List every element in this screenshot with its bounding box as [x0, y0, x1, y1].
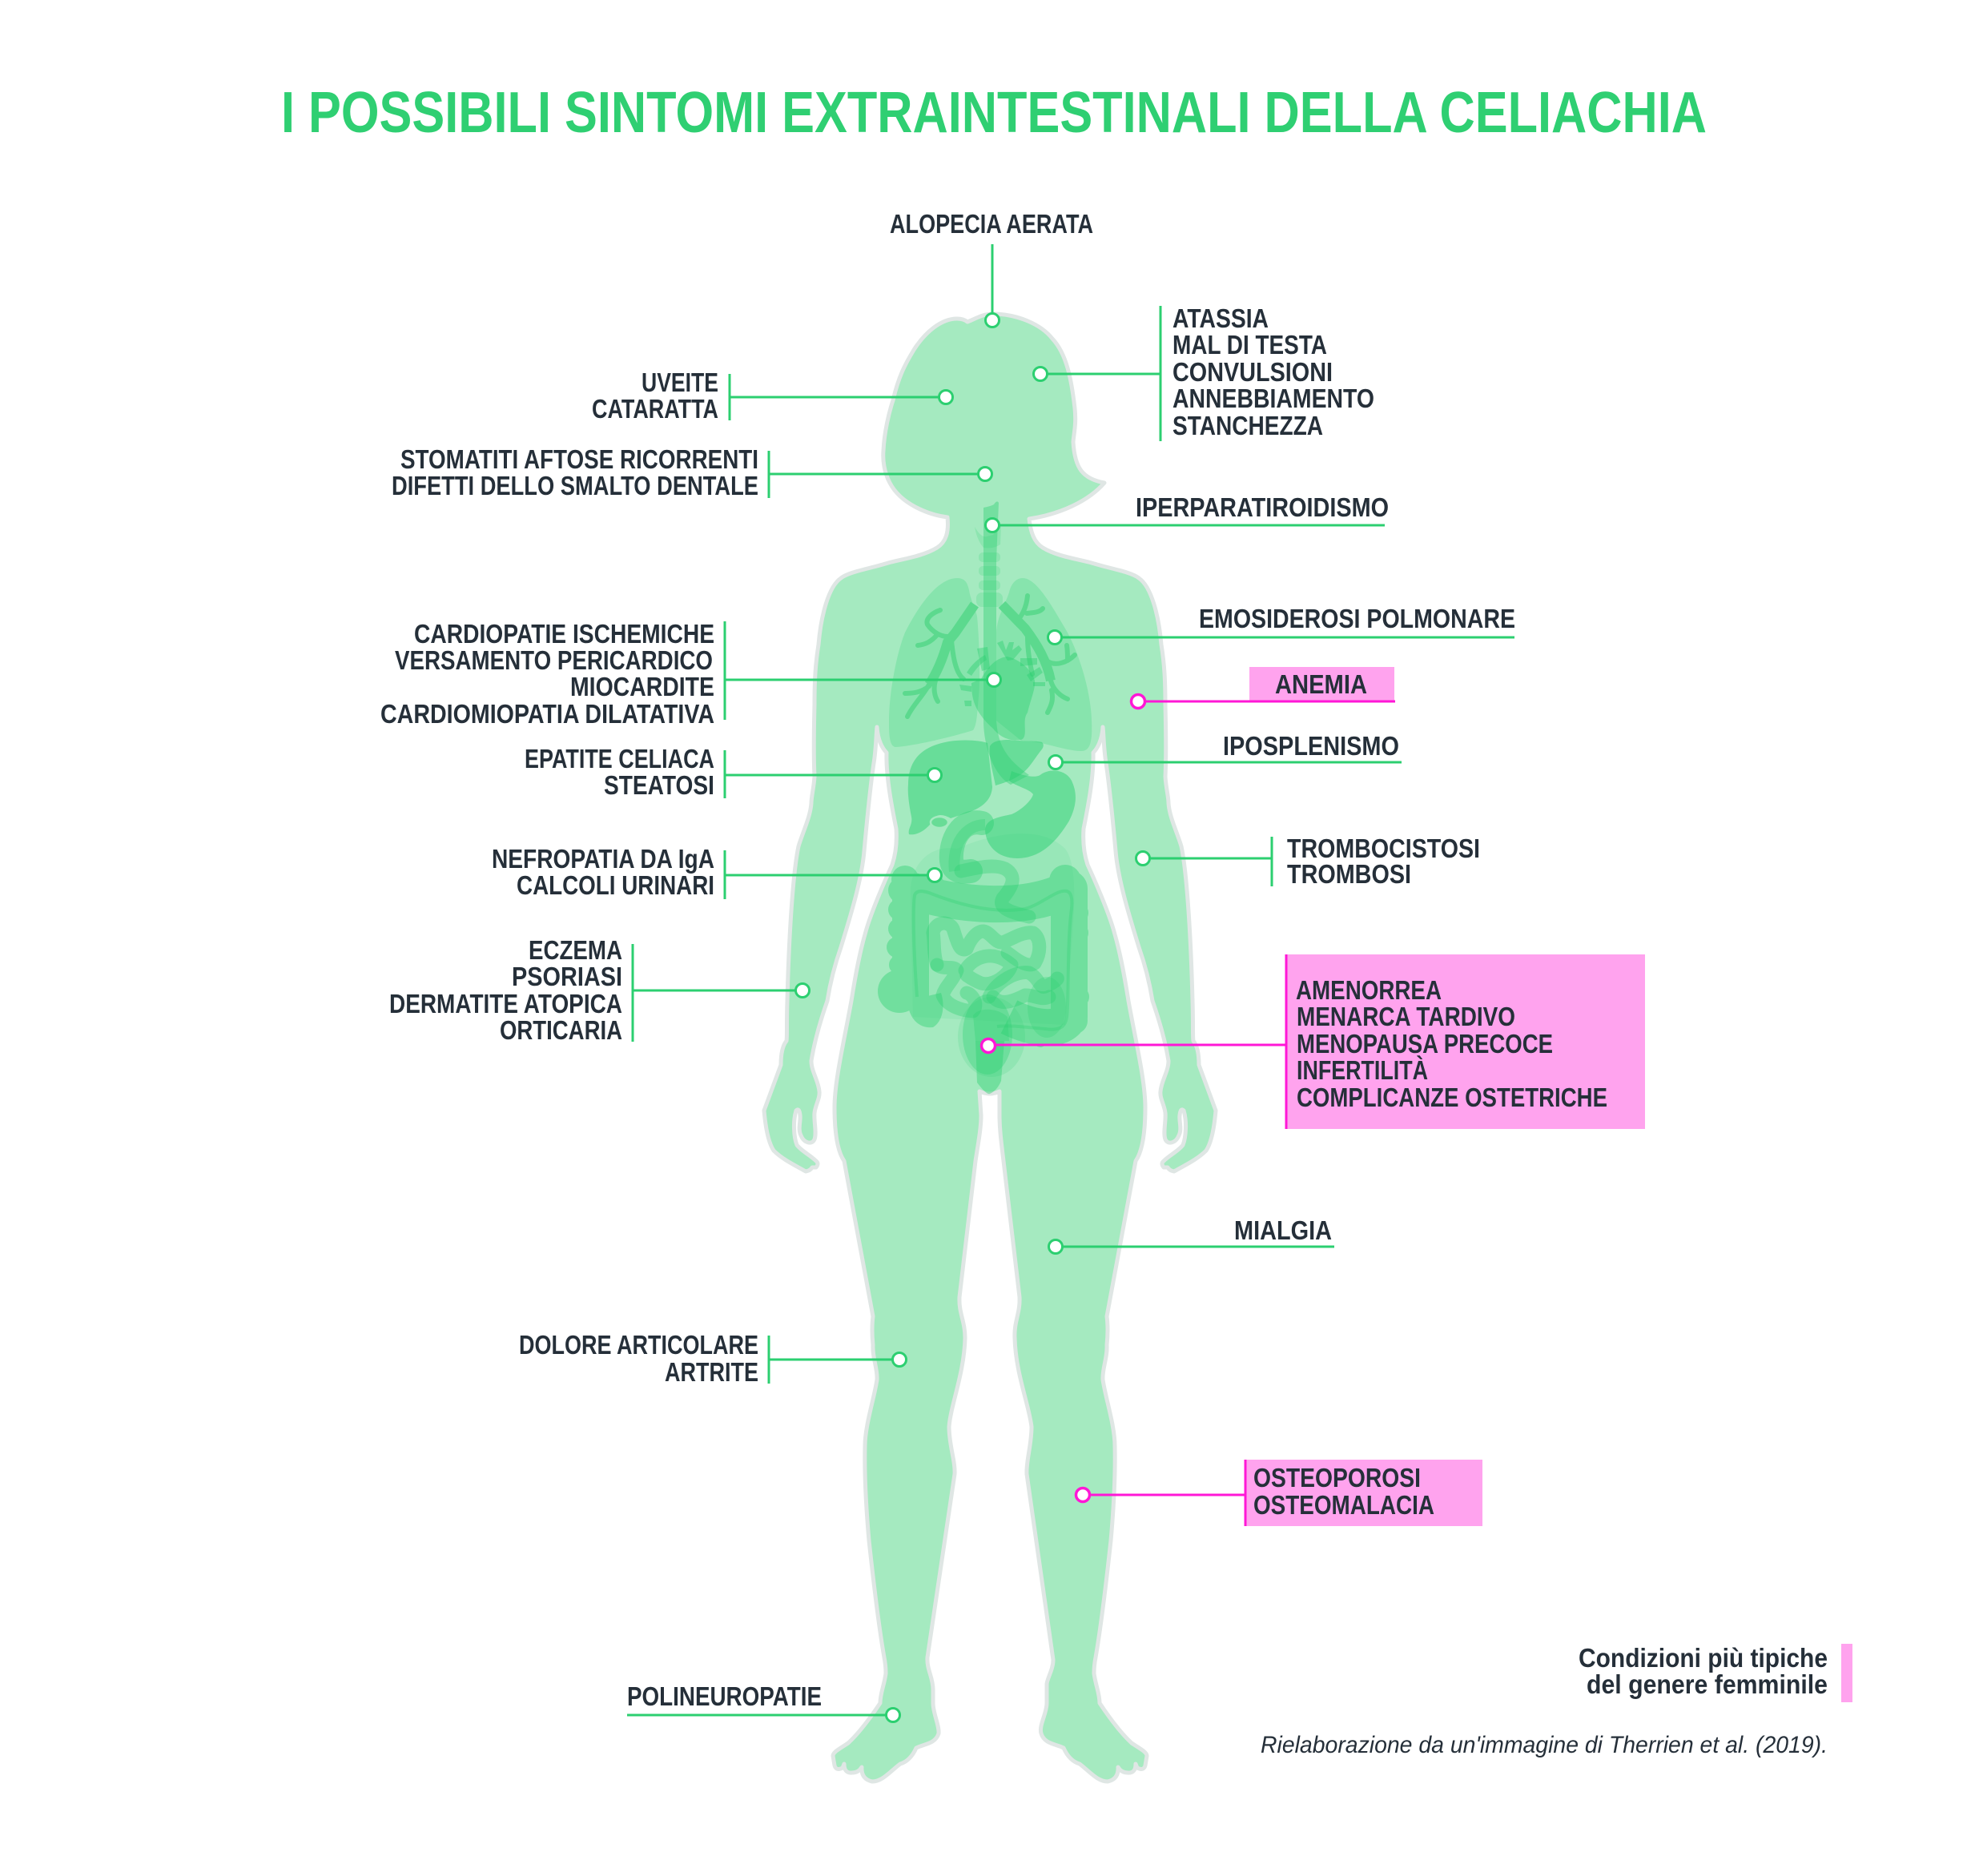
leader line [1056, 1246, 1334, 1247]
leader line [1083, 1460, 1245, 1526]
callout: joints [519, 1330, 907, 1387]
callout: mialgia [1049, 1215, 1334, 1254]
heart [959, 641, 1045, 740]
label list: TROMBOSI [1287, 859, 1411, 889]
label list: MENOPAUSA PRECOCE [1297, 1029, 1553, 1059]
callout: kidneys [492, 844, 942, 900]
small intestine [933, 866, 1057, 1011]
callout: eye [592, 368, 953, 424]
label list [392, 444, 758, 500]
label: IPERPARATIROIDISMO [1136, 492, 1389, 522]
label list [1172, 303, 1374, 440]
callout: neurological symptoms [1033, 303, 1374, 441]
marker [927, 868, 942, 882]
callout: iperparatiroidismo [985, 492, 1389, 532]
label list: COMPLICANZE OSTETRICHE [1297, 1083, 1607, 1112]
label list: ARTRITE [665, 1357, 758, 1387]
label list: INFERTILITÀ [1297, 1055, 1428, 1085]
title: I POSSIBILI SINTOMI EXTRAINTESTINALI DELLA CELIACHIA [281, 81, 1707, 145]
label: EMOSIDEROSI POLMONARE [1199, 604, 1515, 633]
callout: blood [1136, 834, 1480, 889]
label list: DERMATITE ATOPICA [389, 989, 622, 1018]
label list: OSTEOMALACIA [1253, 1490, 1434, 1520]
marker [1131, 695, 1145, 708]
legend text [1579, 1643, 1828, 1699]
marker [796, 983, 809, 998]
label: ANEMIA [1275, 669, 1367, 699]
internal organs [878, 501, 1092, 1094]
marker [979, 468, 991, 480]
label list: STOMATITI AFTOSE RICORRENTI [400, 444, 758, 474]
legend text: Condizioni più tipiche [1579, 1643, 1828, 1673]
leader line [1056, 761, 1402, 764]
callout: alopecia aerata [890, 209, 1093, 327]
marker [939, 391, 953, 404]
label list: CATARATTA [592, 394, 718, 424]
label list: MIOCARDITE [570, 672, 714, 701]
marker [987, 673, 1001, 687]
label list: NEFROPATIA DA IgA [492, 844, 714, 874]
leader line [725, 621, 994, 720]
marker [1049, 756, 1062, 769]
label list: TROMBOCISTOSI [1287, 834, 1480, 863]
legend [1579, 1643, 1852, 1702]
leader line [1055, 636, 1514, 639]
leader line [988, 954, 1286, 1129]
label list [1296, 975, 1607, 1112]
label list: VERSAMENTO PERICARDICO [395, 645, 713, 675]
leader line [1138, 700, 1395, 703]
label list: ATASSIA [1172, 303, 1269, 333]
label list [1287, 834, 1480, 889]
callout: heart [380, 619, 1001, 729]
stomach [985, 770, 1076, 858]
leader line [725, 750, 935, 798]
callout: reproductive system (pink) [982, 954, 1645, 1129]
source note: Rielaborazione da un'immagine di Therrien et al. (2019). [1261, 1732, 1828, 1758]
leader line [769, 1336, 899, 1384]
callout: bones (pink) [1076, 1460, 1482, 1526]
label list [492, 844, 714, 900]
label list: ANNEBBIAMENTO [1172, 384, 1374, 413]
legend text: del genere femminile [1587, 1669, 1828, 1699]
liver left lobe [990, 740, 1044, 785]
label: IPOSPLENISMO [1223, 731, 1399, 761]
marker [1033, 367, 1048, 381]
label list: CARDIOPATIE ISCHEMICHE [414, 619, 714, 649]
large intestine [878, 865, 1089, 1047]
label list: AMENORREA [1296, 975, 1442, 1005]
label list: MENARCA TARDIVO [1297, 1002, 1515, 1031]
label list: ECZEMA [529, 935, 622, 965]
marker [1048, 631, 1062, 644]
colon inner tube [914, 891, 1072, 1030]
ovaries [1028, 977, 1066, 1038]
label list [380, 619, 714, 729]
label list [519, 1330, 758, 1387]
marker [892, 1353, 907, 1366]
callout: mouth [392, 444, 991, 500]
callout: polineuropatie [627, 1681, 900, 1721]
label list [389, 935, 622, 1045]
label list [592, 368, 718, 424]
lungs [889, 578, 1092, 751]
label list: CALCOLI URINARI [517, 870, 714, 900]
liver [908, 741, 992, 834]
label list: ORTICARIA [500, 1015, 622, 1045]
label list [525, 744, 714, 800]
bronchi [905, 596, 1075, 717]
leader line [1143, 837, 1272, 886]
leader line [633, 944, 802, 1042]
marker [1049, 1239, 1062, 1254]
callout: iposplenismo [1049, 731, 1402, 769]
gallbladder [931, 817, 948, 828]
highlight box [1285, 954, 1645, 1129]
label list: DIFETTI DELLO SMALTO DENTALE [392, 471, 758, 500]
leader line [725, 850, 935, 899]
label list [1253, 1463, 1434, 1520]
marker [1076, 1488, 1089, 1502]
label list: UVEITE [642, 368, 718, 397]
leader line [1040, 306, 1160, 441]
callout: liver [525, 744, 942, 800]
callout: anemia (pink) [1131, 667, 1395, 708]
label list: OSTEOPOROSI [1253, 1463, 1421, 1492]
pelvic organs [958, 994, 1025, 1094]
esophagus [983, 501, 1029, 785]
mesentery [911, 834, 1074, 1025]
label: ALOPECIA AERATA [890, 209, 1093, 239]
leader line [627, 1713, 893, 1717]
label list: DOLORE ARTICOLARE [519, 1330, 758, 1360]
marker [886, 1709, 900, 1721]
duodenum [951, 822, 982, 872]
leader line [992, 524, 1385, 527]
callout: skin [389, 935, 809, 1045]
label list: STANCHEZZA [1172, 411, 1323, 440]
leader line [730, 374, 946, 420]
label list: CARDIOMIOPATIA DILATATIVA [380, 699, 714, 729]
label: MIALGIA [1234, 1215, 1332, 1245]
trachea and thyroid [975, 524, 1003, 607]
legend swatch [1841, 1644, 1852, 1702]
label list: CONVULSIONI [1172, 357, 1333, 387]
leader line [991, 244, 993, 314]
body silhouette [764, 314, 1216, 1782]
callout: emosiderosi polmonare [1048, 604, 1515, 644]
label list: PSORIASI [512, 962, 622, 991]
label list: MAL DI TESTA [1172, 330, 1327, 360]
marker [985, 519, 1000, 532]
marker [927, 769, 942, 781]
label: POLINEUROPATIE [627, 1681, 822, 1711]
highlight box [1249, 667, 1394, 701]
label list: STEATOSI [604, 770, 714, 800]
marker [1136, 852, 1150, 865]
label list: EPATITE CELIACA [525, 744, 714, 773]
highlight box [1245, 1460, 1482, 1526]
marker [982, 1039, 995, 1052]
leader line [769, 451, 985, 498]
marker [985, 314, 1000, 327]
